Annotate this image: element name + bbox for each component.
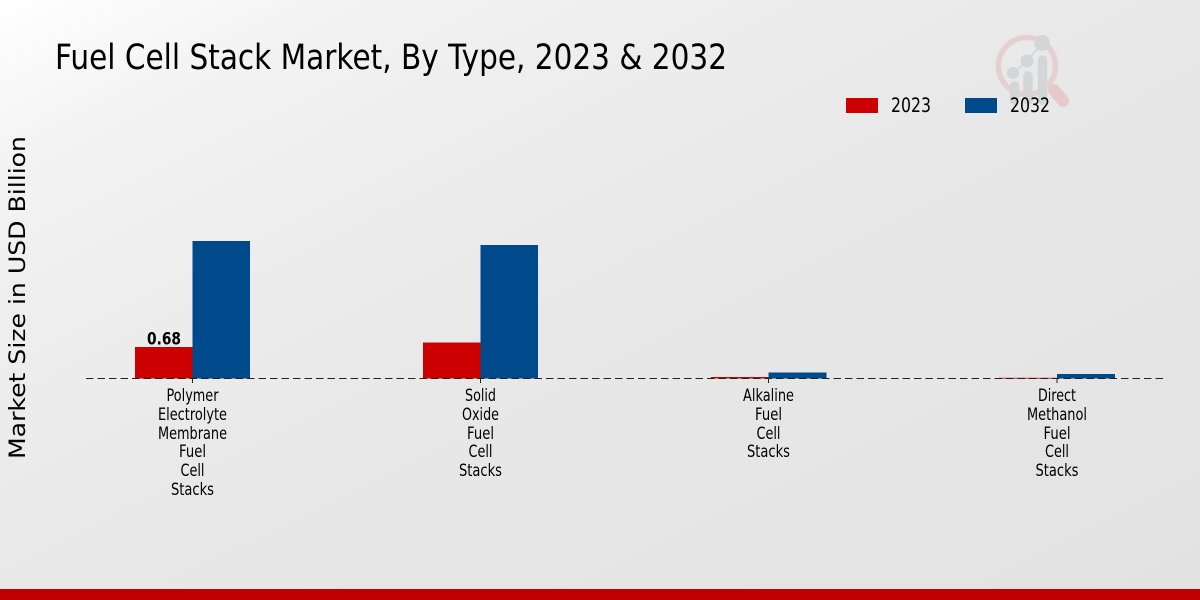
bars: Solid Oxide [423,245,538,378]
category label: Direct Methanol Fuel Cell Stacks: Fuel [1044,424,1070,443]
bars: Direct Methanol [999,374,1115,379]
category label: Solid Oxide Fuel Cell Stacks: Solid [465,386,496,405]
category label: Alkaline Fuel Cell Stacks: Cell [756,424,780,443]
ticks [192,378,1057,383]
legend: 2023 [846,94,931,117]
legend: 2032: 2032 [1010,94,1050,117]
category label: Direct Methanol Fuel Cell Stacks [1027,386,1087,480]
category label: Direct Methanol Fuel Cell Stacks: Methanol [1027,405,1087,424]
legend [846,94,1050,117]
legend: 2032 [965,94,1050,117]
bars: Polymer Electrolyte Membrane [135,241,250,378]
category label: Alkaline Fuel Cell Stacks: Alkaline [743,386,794,405]
category label: Solid Oxide Fuel Cell Stacks: Cell [468,442,492,461]
category label: Polymer Electrolyte Membrane Fuel Cell Stacks [158,386,227,499]
category label: Polymer Electrolyte Membrane Fuel Cell Stacks: Electrolyte [158,405,227,424]
footer bar [0,589,1200,600]
category label: Alkaline Fuel Cell Stacks: Fuel [755,405,782,424]
category label: Polymer Electrolyte Membrane Fuel Cell Stacks: Cell [180,461,204,480]
y-axis label: Market Size in USD Billion [6,136,31,459]
baseline axis [86,378,1164,380]
value label: 0.68 [147,330,181,348]
category label: Solid Oxide Fuel Cell Stacks: Oxide [462,405,499,424]
category label: Polymer Electrolyte Membrane Fuel Cell Stacks: Membrane [158,424,227,443]
icon: watermark logo [998,35,1063,101]
bars: Alkaline [711,372,826,378]
category label: Alkaline Fuel Cell Stacks [743,386,794,461]
bar chart [86,241,1164,383]
category label: Polymer Electrolyte Membrane Fuel Cell Stacks: Polymer [166,386,219,405]
category label: Polymer Electrolyte Membrane Fuel Cell Stacks: Stacks [171,480,214,499]
category label: Direct Methanol Fuel Cell Stacks: Direct [1038,386,1076,405]
category label: Solid Oxide Fuel Cell Stacks: Fuel [467,424,494,443]
title: Fuel Cell Stack Market, By Type, 2023 & 2032 [55,38,727,78]
category label: Direct Methanol Fuel Cell Stacks: Cell [1045,442,1069,461]
legend: 2023: 2023 [891,94,931,117]
category label: Polymer Electrolyte Membrane Fuel Cell Stacks: Fuel [179,442,206,461]
category label: Alkaline Fuel Cell Stacks: Stacks [747,442,790,461]
category label: Direct Methanol Fuel Cell Stacks: Stacks [1036,461,1078,480]
category label: Solid Oxide Fuel Cell Stacks: Stacks [459,461,502,480]
category label: Solid Oxide Fuel Cell Stacks [459,386,502,480]
